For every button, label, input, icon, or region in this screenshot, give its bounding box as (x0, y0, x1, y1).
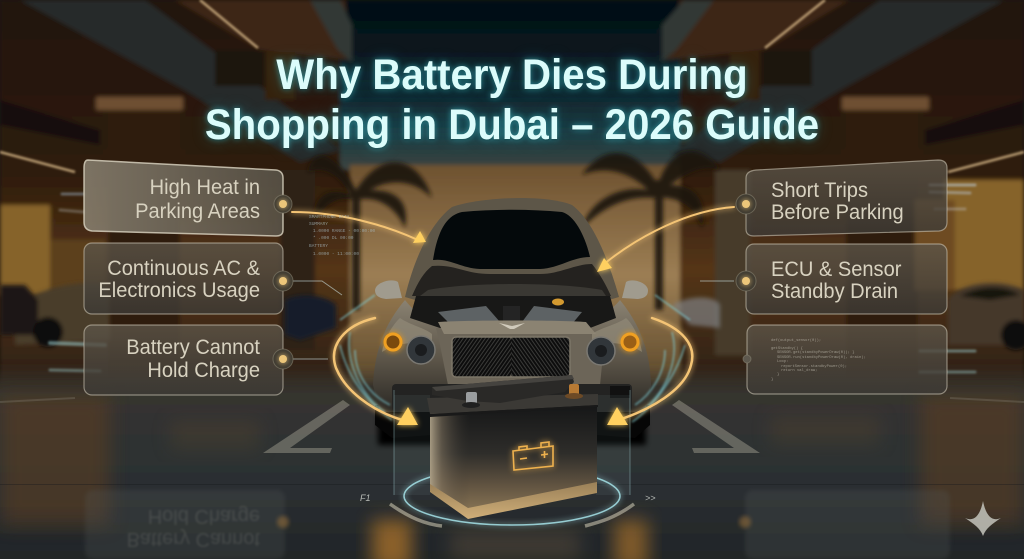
hologram marks: F1 (360, 493, 371, 503)
hologram marks: >> (645, 493, 656, 503)
car shadow (378, 415, 646, 445)
upper brown soffits (175, 0, 352, 60)
dark beams (215, 50, 265, 86)
nose band (436, 328, 604, 385)
label: battery cannot hold charge: Battery Cannot (126, 336, 260, 359)
title: Why Battery Dies During (276, 51, 748, 99)
mirrors (375, 280, 402, 299)
label: battery cannot hold charge: Hold Charge (147, 359, 260, 382)
hologram data text: * .000 DL 00:00 (313, 235, 354, 241)
floor warm reflections (372, 520, 412, 559)
hologram data text: BATTERY (309, 243, 328, 249)
label: continuous AC (98, 257, 260, 302)
grille (452, 337, 570, 377)
slate beams (20, 0, 340, 162)
label: ECU standby: Standby Drain (771, 280, 898, 303)
battery top (427, 394, 598, 414)
sparkle watermark (965, 501, 1001, 536)
label: ECU standby: ECU & Sensor (771, 258, 901, 281)
label: short trips (771, 179, 904, 224)
label: high heat (135, 176, 260, 223)
emblem (499, 323, 525, 329)
motion streaks (50, 185, 975, 372)
panel: right 1 glass (746, 160, 947, 236)
label: high heat: Parking Areas (135, 200, 260, 223)
connector nodes (273, 194, 756, 369)
panel: left 2 glass (84, 243, 283, 314)
panel code text: } (777, 372, 779, 377)
reflected panels on floor: Battery Cannot (127, 528, 260, 550)
floor (0, 378, 1024, 559)
panel code text: reportSensor.standbyPower(0); (781, 364, 847, 369)
warm wall sections (0, 205, 50, 295)
label: continuous AC: Continuous AC & (107, 257, 260, 280)
panel code text: } (771, 377, 773, 382)
holographic frame around battery (390, 390, 634, 526)
label: high heat: High Heat in (150, 176, 260, 199)
hologram data text (309, 214, 375, 257)
fender highlights (382, 318, 432, 352)
battery (427, 375, 598, 519)
headlights (385, 334, 638, 365)
reflected panels on floor (85, 490, 950, 559)
car tyres (375, 405, 432, 438)
hologram marks (360, 493, 656, 503)
arrow: swirl right (618, 318, 692, 420)
panel: right 3 glass (747, 325, 947, 394)
hologram data text: 1.0000 RANGE - 00:00:00 (313, 228, 375, 234)
arrow: swirl left (334, 318, 402, 420)
engine bay (410, 296, 616, 328)
hologram data text: SMARTPHONE DATA (309, 214, 350, 220)
panel: right 2 glass (746, 244, 947, 314)
car body (373, 300, 651, 412)
panel: left 1 glass (84, 160, 283, 236)
panel code text: Loop: (777, 360, 788, 364)
panel code text (771, 338, 866, 382)
arrow: top-left to hood (292, 212, 418, 240)
hologram data text: 1.0000 - 11:00:00 (313, 251, 359, 257)
title: Shopping in Dubai – 2026 Guide (205, 101, 819, 149)
arrows (292, 207, 734, 420)
label: short trips: Before Parking (771, 201, 904, 224)
label: continuous AC: Electronics Usage (98, 279, 260, 302)
lower bumper (392, 384, 632, 412)
reflected panels on floor: Hold Charge (148, 505, 260, 527)
battery lid (432, 375, 574, 403)
battery terminals (466, 392, 477, 405)
hologram data text: SUMMARY (309, 221, 328, 227)
title (202, 51, 823, 152)
panel code text: getStandby() { (771, 346, 803, 351)
panel: left 3 glass (84, 325, 283, 395)
parking lines (263, 400, 350, 453)
holographic swooshes (340, 295, 690, 422)
label: battery cannot hold charge (126, 336, 260, 382)
panel code text: def(output_sensor(0)); (771, 338, 821, 343)
icon: battery symbol (513, 442, 553, 470)
car (373, 198, 651, 445)
battery base (430, 482, 597, 519)
pillars (108, 108, 180, 378)
background: palm trees (308, 151, 720, 310)
panel code text: SENSOR.run(standbyPowerDraw(0), drain); (777, 355, 866, 360)
label: short trips: Short Trips (771, 179, 868, 202)
connector lines (293, 281, 734, 359)
label: ECU standby (771, 258, 902, 303)
hood open (405, 198, 619, 302)
background parked cars (0, 283, 1024, 350)
panel code text: SENSOR.get(standbyPowerDraw(0)); } (777, 350, 854, 355)
arrow: top-right to hood (604, 207, 734, 264)
ceiling light strips (0, 0, 1024, 172)
arrowheads (397, 231, 628, 425)
panel code text: return val_draw; (781, 368, 817, 373)
